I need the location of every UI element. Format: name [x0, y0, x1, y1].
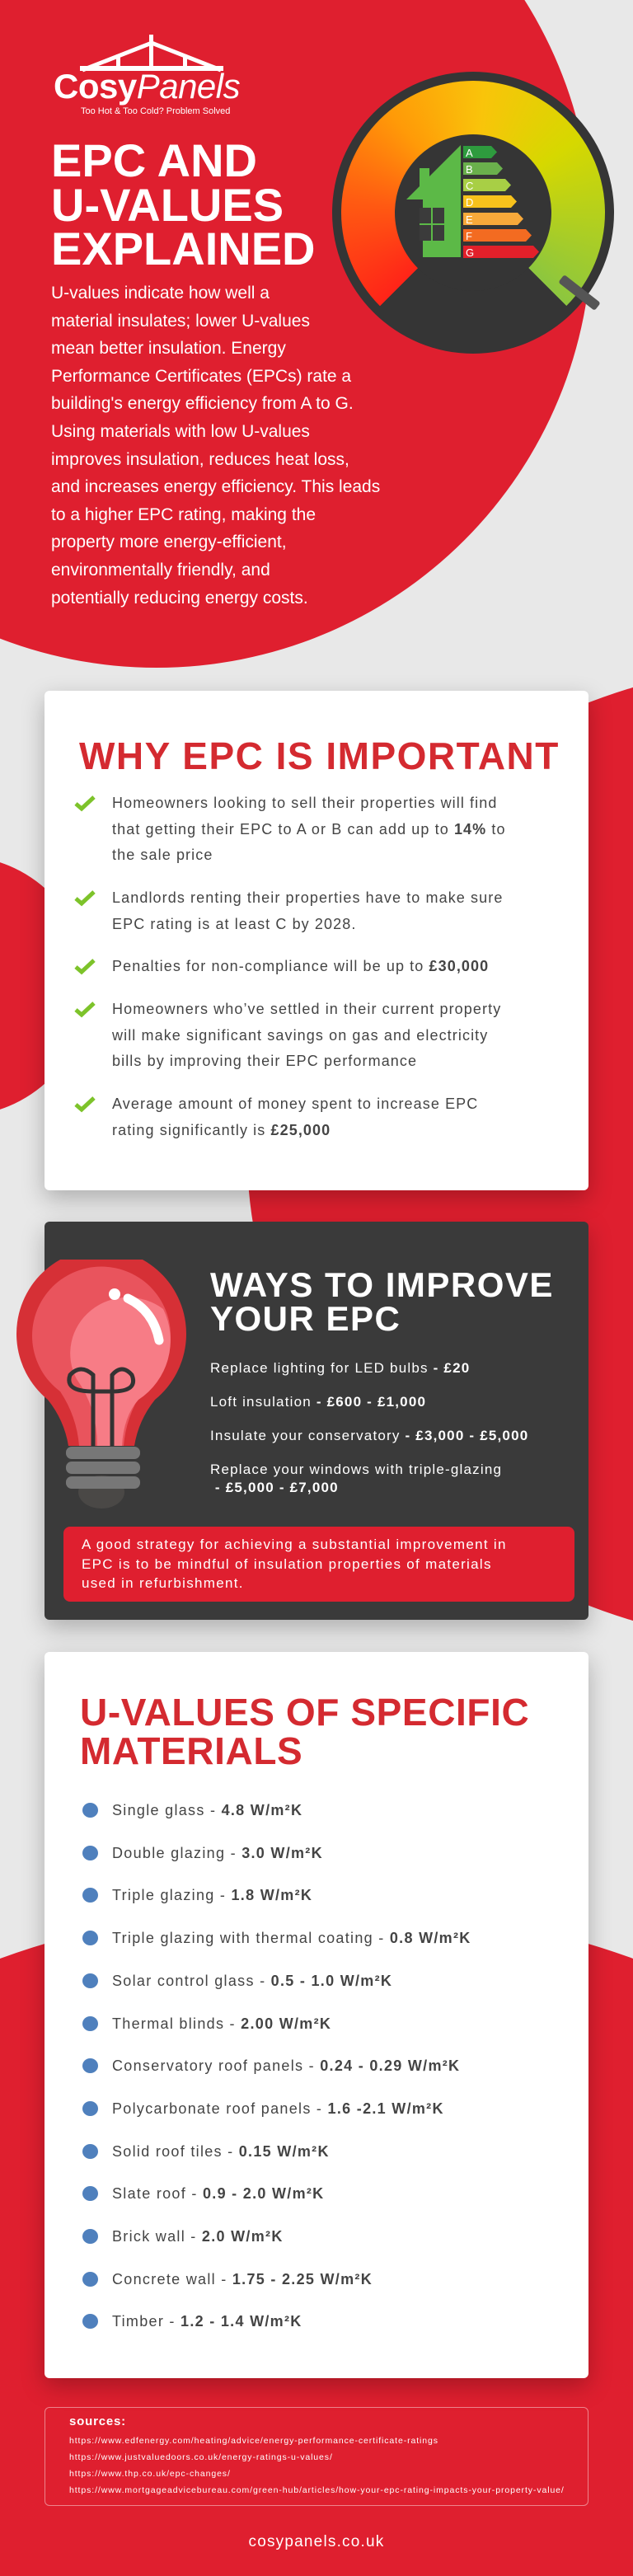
material list: Double glazing - 3.0 W/m²K [112, 1845, 323, 1861]
intro paragraph: Performance Certificates (EPCs) rate a [51, 367, 351, 386]
rating bars: E [466, 213, 473, 226]
heading: WHY EPC IS IMPORTANT [79, 734, 560, 777]
title: EPC AND [51, 134, 257, 186]
item 4 [210, 1462, 502, 1495]
rating bars: C [466, 180, 473, 192]
sources box [45, 2407, 588, 2506]
panel: ways to improve [45, 1222, 588, 1620]
material list: Solar control glass - 0.5 - 1.0 W/m²K [112, 1973, 392, 1989]
intro paragraph: Using materials with low U-values [51, 422, 310, 441]
material list: Conservatory roof panels - 0.24 - 0.29 W/m²K [112, 2058, 460, 2074]
item 4: Replace your windows with triple-glazing [210, 1462, 502, 1477]
logo: CosyPanels [54, 67, 240, 106]
bullet 4: bills by improving their EPC performance [112, 1053, 417, 1069]
bullet 1 [74, 795, 506, 863]
item 2: Loft insulation - £600 - £1,000 [210, 1394, 426, 1410]
material list: Triple glazing with thermal coating - 0.8 W/m²K [112, 1930, 471, 1946]
heading: U-VALUES OF SPECIFIC [80, 1691, 529, 1734]
heading: YOUR EPC [210, 1299, 401, 1338]
material list: Solid roof tiles - 0.15 W/m²K [112, 2143, 330, 2160]
heading [210, 1265, 554, 1338]
intro paragraph [51, 284, 380, 608]
bullet 4 [74, 1001, 501, 1069]
title: U-VALUES [51, 178, 284, 231]
logo: Too Hot & Too Cold? Problem Solved [81, 106, 230, 116]
bullet 1: Homeowners looking to sell their properties will find [112, 795, 497, 811]
intro paragraph: mean better insulation. Energy [51, 339, 286, 358]
panel: u-values of specific materials [45, 1652, 588, 2378]
item 1: Replace lighting for LED bulbs - £20 [210, 1360, 470, 1376]
sources box: https://www.edfenergy.com/heating/advice/energy-performance-certificate-ratings [69, 2436, 438, 2446]
intro paragraph: improves insulation, reduces heat loss, [51, 450, 349, 469]
title [51, 134, 315, 274]
item 4: - £5,000 - £7,000 [215, 1480, 339, 1495]
material list: Polycarbonate roof panels - 1.6 -2.1 W/m²K [112, 2100, 444, 2117]
bullet 5 [74, 1096, 478, 1138]
intro paragraph: environmentally friendly, and [51, 561, 270, 579]
material list: Thermal blinds - 2.00 W/m²K [112, 2015, 331, 2031]
material list [82, 1802, 471, 2330]
logo [54, 35, 240, 116]
icon: EPC gauge [332, 72, 614, 354]
item 3: Insulate your conservatory - £3,000 - £5,000 [210, 1428, 528, 1443]
intro paragraph: material insulates; lower U-values [51, 312, 310, 331]
needle [558, 274, 601, 311]
bullet 4: will make significant savings on gas and electricity [112, 1027, 488, 1044]
intro paragraph: property more energy-efficient, [51, 533, 287, 551]
rating bars: B [466, 163, 473, 176]
callout: A good strategy for achieving a substantial improvement in [82, 1537, 507, 1552]
rating bars: G [466, 246, 474, 259]
heading: WAYS TO IMPROVE [210, 1265, 554, 1304]
rating bars: D [466, 196, 473, 209]
icon: light bulb [16, 1260, 186, 1509]
material list: Brick wall - 2.0 W/m²K [112, 2228, 284, 2245]
intro paragraph: potentially reducing energy costs. [51, 589, 308, 608]
material list: Single glass - 4.8 W/m²K [112, 1802, 302, 1818]
callout: used in refurbishment. [82, 1575, 244, 1591]
intro paragraph: to a higher EPC rating, making the [51, 505, 316, 524]
bullet 2: EPC rating is at least C by 2028. [112, 916, 356, 932]
bullet 2 [74, 889, 503, 932]
bullet 5: rating significantly is £25,000 [112, 1122, 331, 1138]
bullet 1: the sale price [112, 847, 213, 863]
sources box: sources: [69, 2414, 126, 2428]
panel: why EPC is important [45, 691, 588, 1190]
material list: Slate roof - 0.9 - 2.0 W/m²K [112, 2185, 324, 2202]
house [406, 145, 461, 257]
bullet 2: Landlords renting their properties have to make sure [112, 889, 503, 906]
footer url: cosypanels.co.uk [249, 2533, 384, 2550]
callout [63, 1527, 574, 1602]
heading: MATERIALS [80, 1729, 302, 1772]
intro paragraph: building's energy efficiency from A to G. [51, 394, 354, 413]
callout: EPC is to be mindful of insulation properties of materials [82, 1556, 492, 1571]
bullet 4: Homeowners who’ve settled in their current property [112, 1001, 501, 1017]
sources box: https://www.thp.co.uk/epc-changes/ [69, 2469, 231, 2479]
title: EXPLAINED [51, 223, 315, 274]
bullet 3: Penalties for non-compliance will be up to £30,000 [112, 958, 489, 974]
material list: Timber - 1.2 - 1.4 W/m²K [112, 2313, 302, 2330]
intro paragraph: and increases energy efficiency. This leads [51, 477, 380, 496]
bullet 1: that getting their EPC to A or B can add up to 14% to [112, 821, 506, 838]
bullet 5: Average amount of money spent to increase EPC [112, 1096, 478, 1112]
rating bars: F [466, 230, 472, 242]
rating bars [463, 146, 539, 259]
material list: Triple glazing - 1.8 W/m²K [112, 1887, 312, 1903]
material list: Concrete wall - 1.75 - 2.25 W/m²K [112, 2271, 373, 2287]
rating bars: A [466, 147, 473, 159]
heading [80, 1691, 529, 1772]
intro paragraph: U-values indicate how well a [51, 284, 270, 303]
sources box: https://www.justvaluedoors.co.uk/energy-ratings-u-values/ [69, 2452, 333, 2462]
sources box: https://www.mortgageadvicebureau.com/green-hub/articles/how-your-epc-rating-impacts-your-property-value/ [69, 2485, 565, 2495]
